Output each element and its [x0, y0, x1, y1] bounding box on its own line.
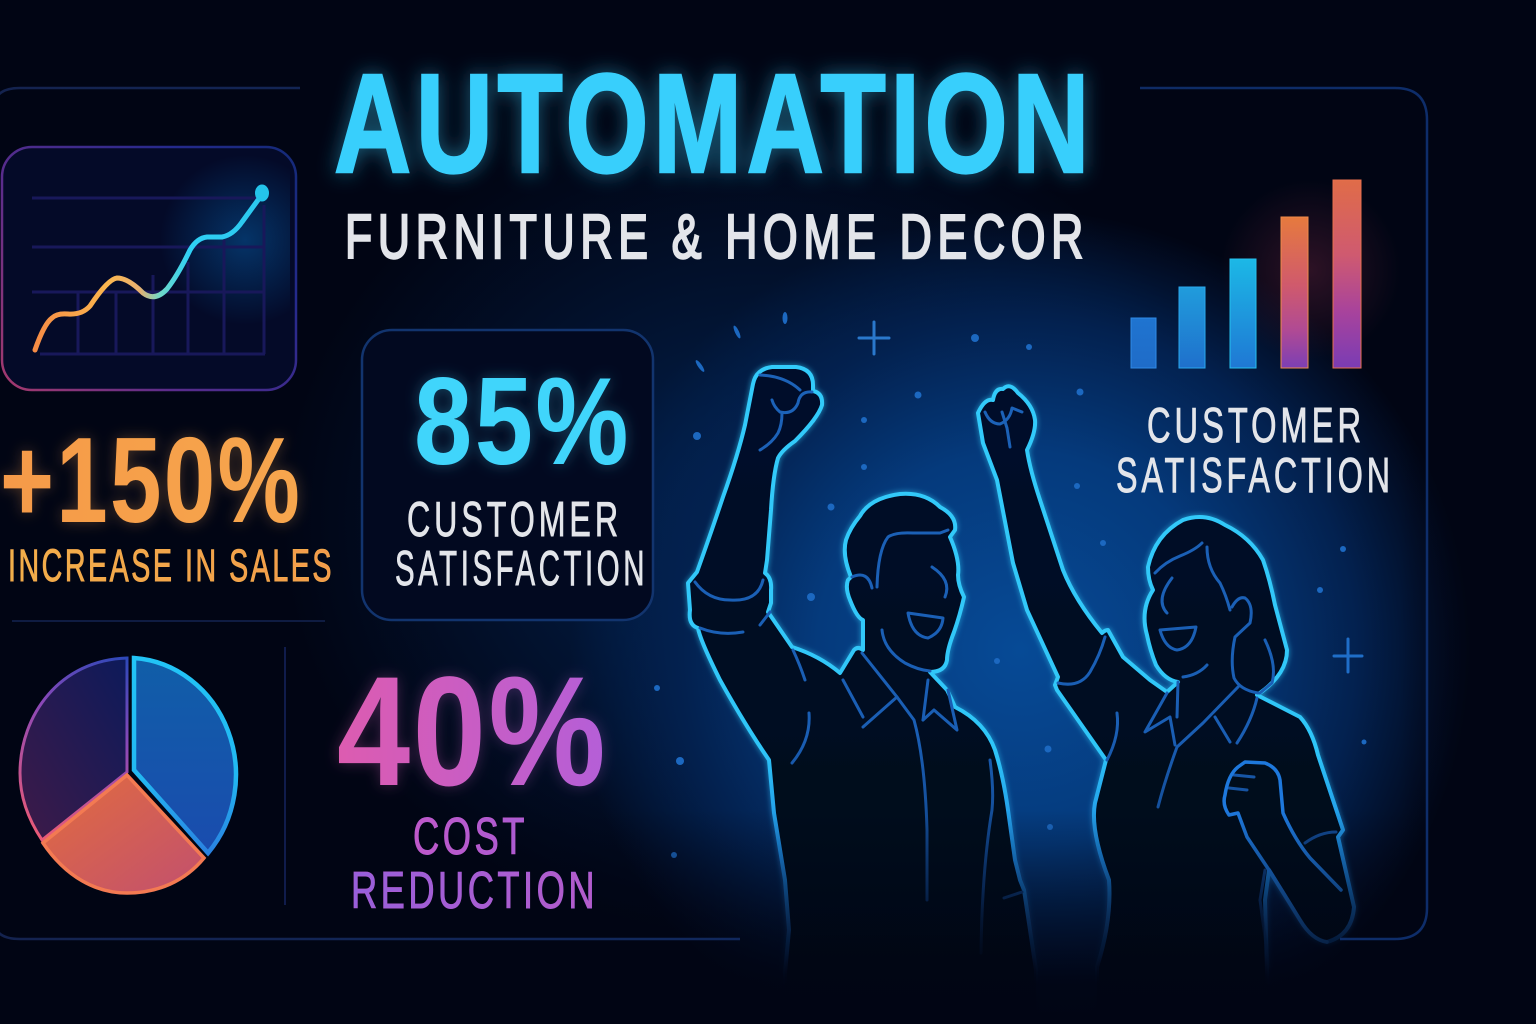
- slice: purple: [20, 658, 127, 840]
- subtitle: FURNITURE & HOME DECOR: [345, 203, 1089, 272]
- slice: orange: [43, 775, 204, 893]
- bar chart: [1131, 180, 1361, 368]
- plus sparkle top: [859, 322, 889, 354]
- figure: man: [688, 367, 1036, 1024]
- panel: customer satisfaction 85%: SATISFACTION: [395, 542, 648, 596]
- pie chart: [20, 658, 236, 893]
- stat: sales increase: [0, 412, 334, 591]
- right label: customer satisfaction: SATISFACTION: [1116, 449, 1394, 503]
- outer frame: [0, 88, 1427, 939]
- sparkle particles: [654, 312, 1366, 858]
- stat: sales increase: +150%: [0, 412, 302, 548]
- panel: customer satisfaction 85%: 85%: [414, 353, 631, 491]
- slice: blue: [134, 658, 236, 853]
- stat: cost reduction: [337, 645, 608, 920]
- panel: customer satisfaction 85%: [362, 330, 653, 620]
- woman inner line details: [985, 408, 1336, 967]
- woman lower hand: [1224, 762, 1341, 942]
- plus sparkle right: [1334, 639, 1362, 672]
- right label: customer satisfaction: [1116, 399, 1394, 503]
- man inner line details: [695, 375, 1022, 953]
- right label: customer satisfaction: CUSTOMER: [1147, 399, 1365, 453]
- divider: [12, 620, 325, 622]
- panel: customer satisfaction 85%: CUSTOMER: [407, 493, 622, 547]
- stat: cost reduction: 40%: [337, 645, 608, 819]
- divider: [284, 647, 286, 905]
- trend line: [35, 200, 258, 350]
- trend end dot: [255, 184, 269, 202]
- bottom fade: [0, 810, 1536, 1024]
- figure: woman: [978, 386, 1354, 1024]
- stat: sales increase: INCREASE IN SALES: [8, 540, 334, 591]
- right edge fade: [1400, 0, 1536, 1024]
- stat: cost reduction: COST: [413, 808, 528, 866]
- title: AUTOMATION: [334, 44, 1094, 202]
- stat: cost reduction: REDUCTION: [351, 862, 598, 920]
- panel: line chart: [2, 147, 296, 390]
